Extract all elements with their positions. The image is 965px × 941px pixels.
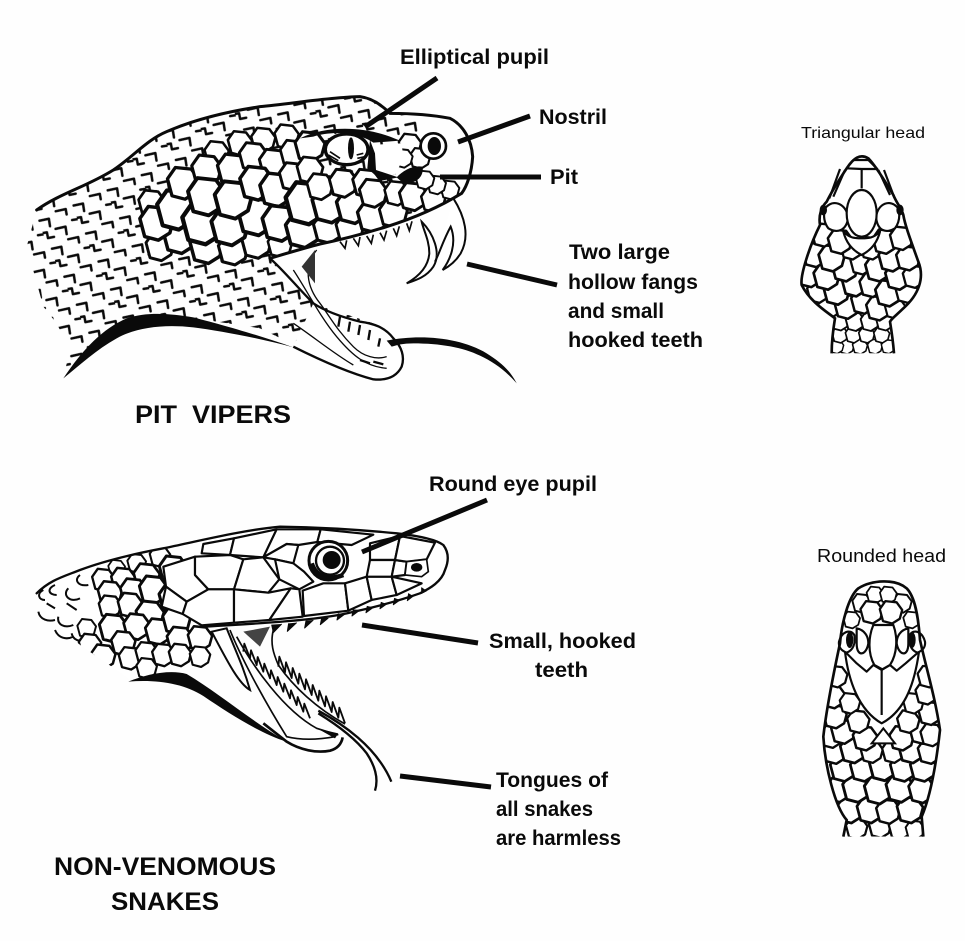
label: two large hollow fangs: hollow fangs	[568, 271, 698, 294]
silhouette	[823, 581, 940, 837]
label: two large hollow fangs: Two large	[569, 241, 670, 264]
label: nostril: Nostril	[539, 106, 607, 129]
label: pit: Pit	[550, 166, 578, 189]
heat pit	[397, 166, 423, 183]
pointer: nostril	[458, 116, 530, 142]
scales	[798, 223, 925, 354]
outline	[801, 156, 921, 353]
lower jaw: non-venomous	[128, 627, 345, 752]
loreal plate	[370, 143, 403, 175]
outline	[823, 581, 940, 837]
heading: non-venomous snakes	[54, 853, 276, 916]
nostril	[421, 133, 446, 159]
label: two large hollow fangs	[568, 241, 703, 352]
rear scales	[820, 666, 943, 840]
upper teeth: viper	[340, 221, 412, 248]
label: tongues are harmless: all snakes	[496, 798, 593, 821]
tongue: viper	[387, 337, 517, 383]
fangs	[407, 198, 466, 283]
scale texture: viper neck	[27, 98, 418, 366]
outline: non-venomous upper head	[37, 527, 448, 627]
pointer: round eye pupil	[362, 500, 487, 552]
panel: non-venomous snake head	[37, 527, 448, 791]
scale arcs: tail end	[38, 575, 93, 641]
head from above: rounded	[820, 581, 943, 840]
eyes	[820, 205, 904, 215]
upper teeth: non-venomous	[272, 587, 427, 633]
heading: non-venomous snakes: SNAKES	[111, 888, 219, 916]
head silhouette	[37, 527, 448, 680]
label: small hooked teeth	[489, 630, 636, 682]
label: tongues are harmless: Tongues of	[496, 769, 609, 792]
head scales: viper	[139, 125, 459, 265]
large head plates	[162, 529, 435, 625]
label: small hooked teeth: teeth	[535, 659, 588, 682]
label: two large hollow fangs: and small	[568, 300, 664, 323]
pointer: elliptical pupil	[365, 78, 437, 127]
eyes	[846, 632, 916, 648]
label: small hooked teeth: Small, hooked	[489, 630, 636, 653]
label: triangular head: Triangular head	[801, 125, 925, 142]
nostril plate	[405, 559, 428, 577]
tongue: non-venomous	[318, 711, 391, 791]
label: elliptical pupil: Elliptical pupil	[400, 46, 549, 69]
eye: round pupil	[309, 541, 348, 580]
pointer: pit	[440, 174, 541, 180]
label: tongues are harmless	[496, 769, 621, 850]
pointer: fangs	[467, 264, 557, 285]
panel: pit viper head	[20, 90, 517, 383]
outline: viper upper head	[37, 97, 473, 258]
heading: pit vipers: PIT VIPERS	[135, 401, 291, 429]
label: two large hollow fangs: hooked teeth	[568, 329, 703, 352]
silhouette	[801, 156, 921, 353]
label: rounded head: Rounded head	[817, 546, 946, 566]
head plates and centre seam	[839, 625, 925, 723]
body scales: non-venomous	[77, 546, 212, 679]
head plates	[824, 160, 899, 255]
label: round eye pupil: Round eye pupil	[429, 473, 597, 496]
heading: non-venomous snakes: NON-VENOMOUS	[54, 853, 276, 881]
label: tongues are harmless: are harmless	[496, 827, 621, 850]
front scales	[843, 587, 920, 628]
eye: elliptical pupil	[300, 129, 400, 181]
lower jaw: viper	[63, 250, 403, 380]
pointer: small hooked teeth	[362, 625, 478, 643]
pointer: tongue	[400, 776, 491, 787]
head from above: triangular	[798, 156, 925, 354]
